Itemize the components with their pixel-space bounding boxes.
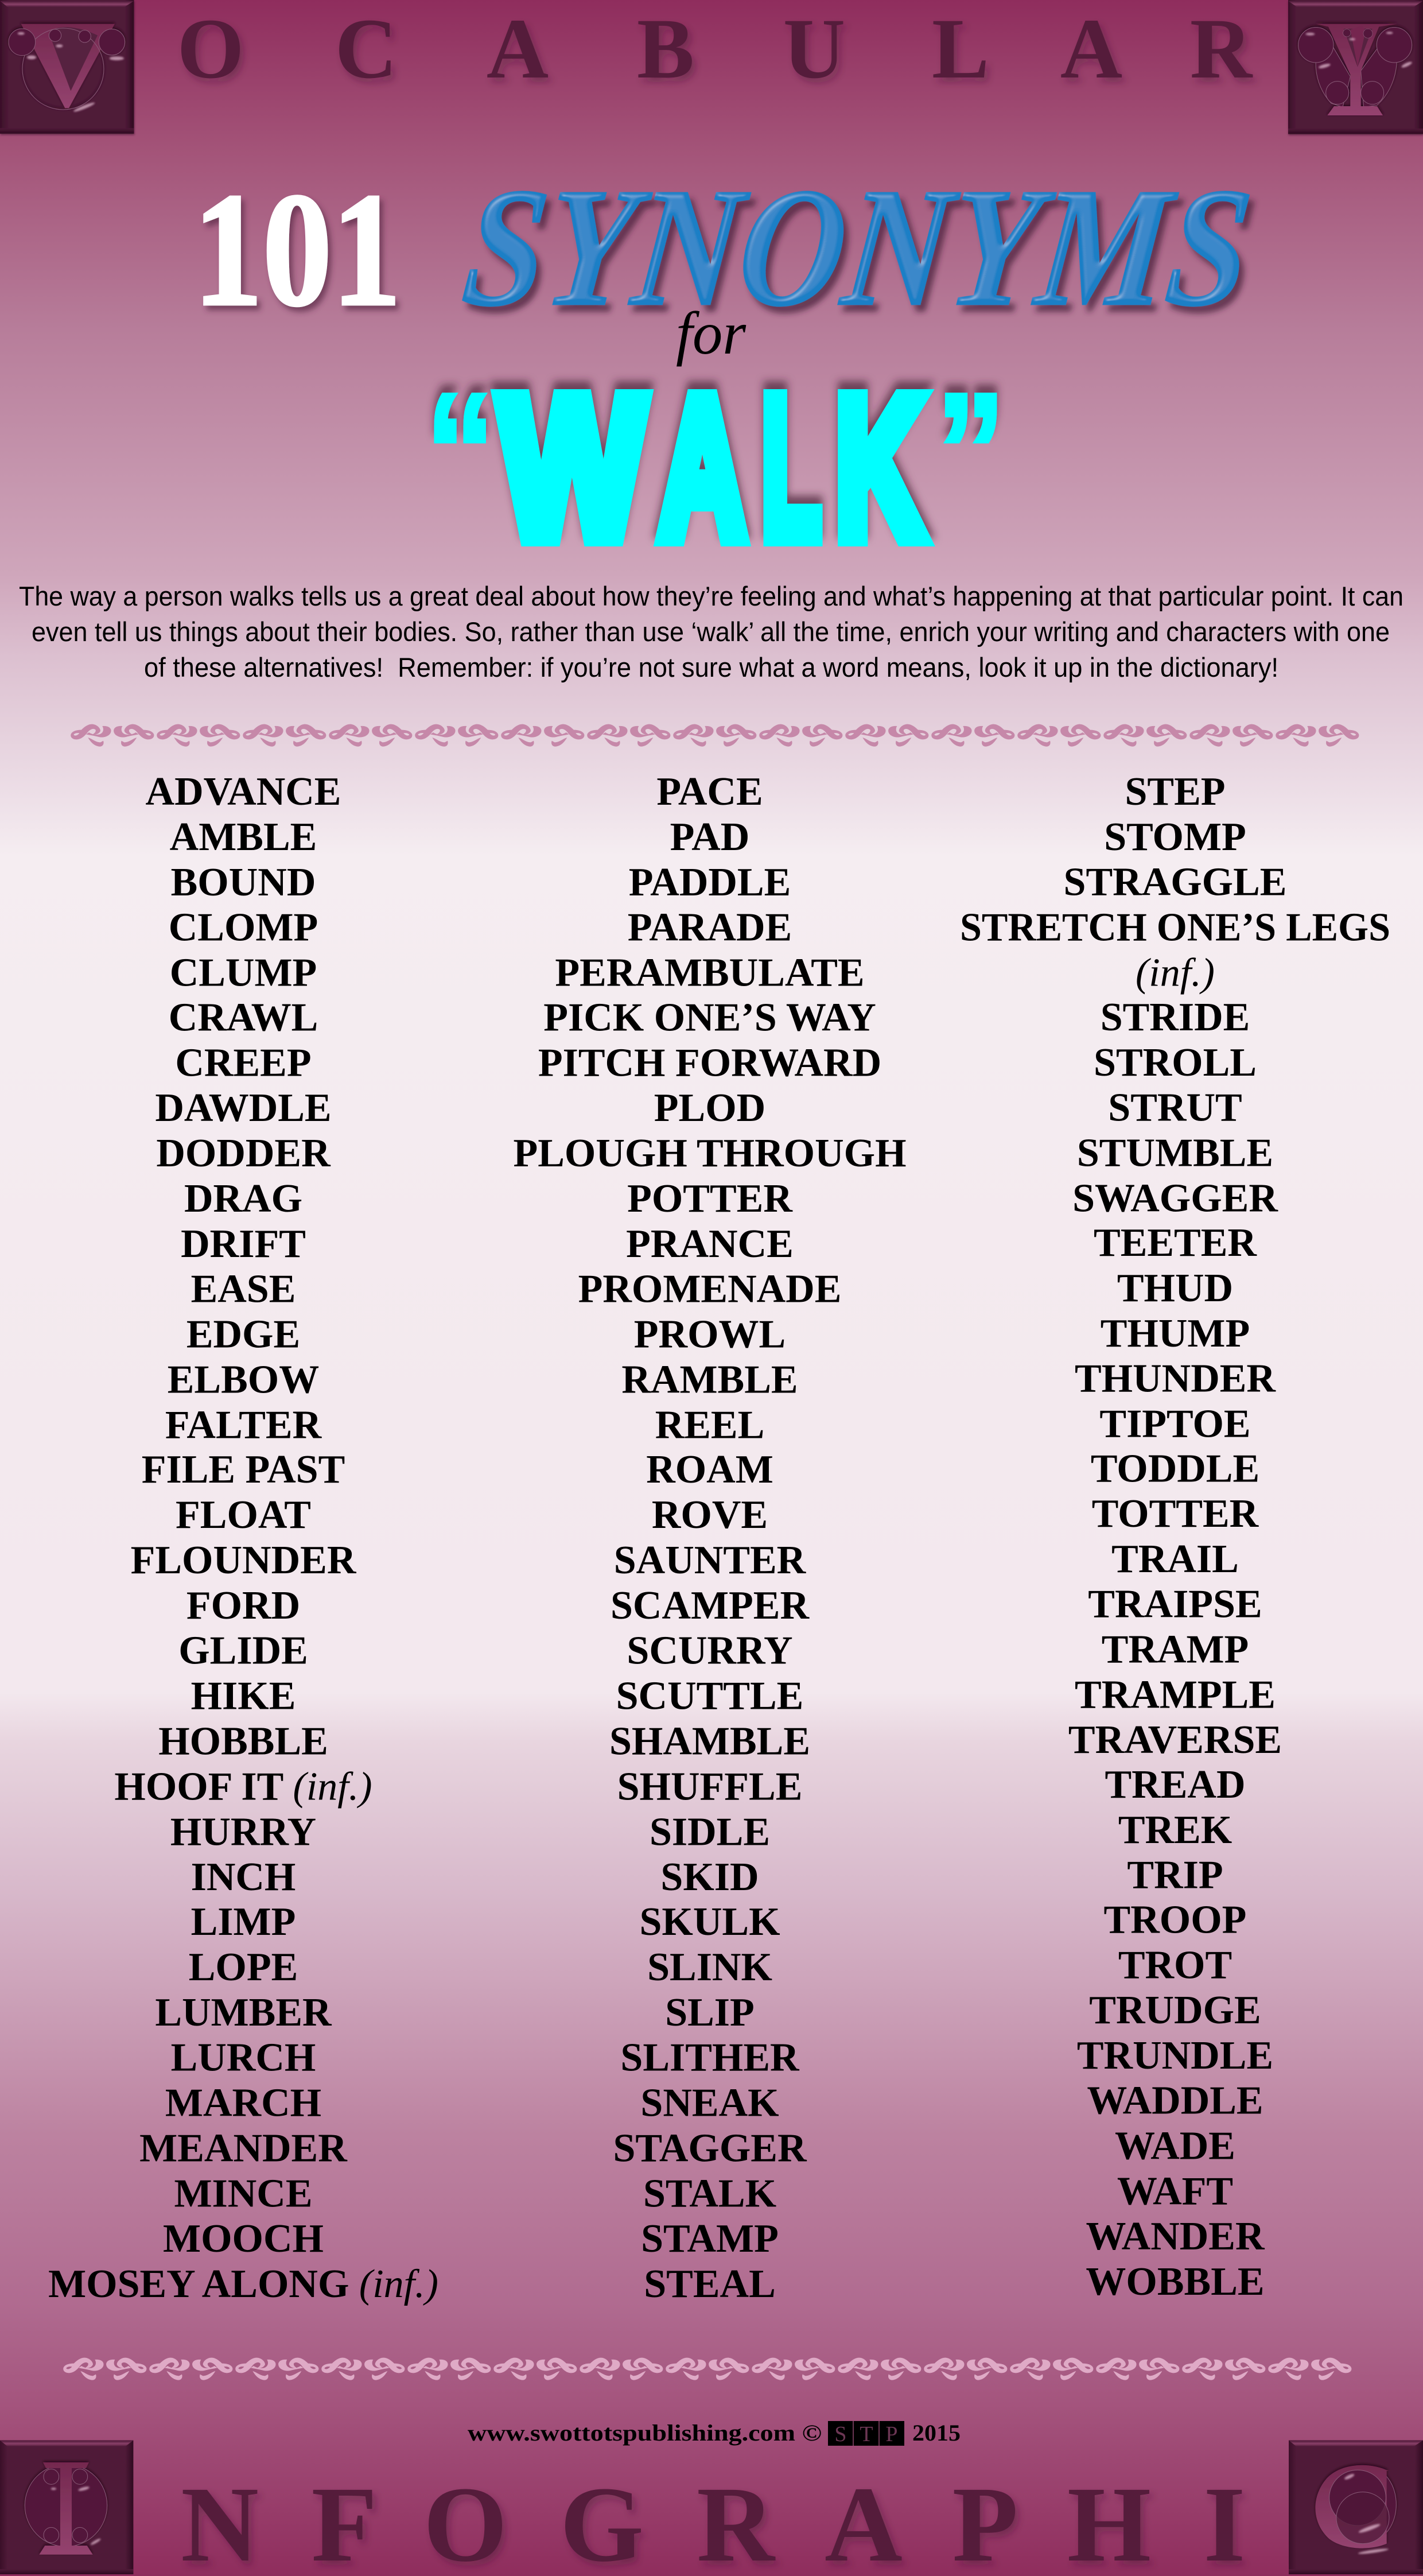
word column 1: MINCE — [174, 2171, 313, 2216]
word column 2: ROAM — [646, 1448, 773, 1492]
word column 2: PITCH FORWARD — [538, 1041, 881, 1085]
word column 1: CREEP — [175, 1041, 312, 1085]
word column 1: ELBOW — [168, 1358, 319, 1402]
word column 2: SCURRY — [627, 1629, 793, 1673]
footer credit: www.swottotspublishing.com © — [468, 2420, 822, 2446]
word column 3: TOTTER — [1092, 1492, 1259, 1536]
word column 2: SAUNTER — [614, 1538, 807, 1582]
heading: VOCABULARY top letters: U — [783, 1, 845, 96]
footer STP logo — [828, 2421, 904, 2446]
word column 2: PLOUGH THROUGH — [513, 1131, 907, 1176]
word column 1: EASE — [191, 1267, 296, 1312]
word column 3: TROOP — [1104, 1898, 1246, 1942]
word column 2: PROWL — [634, 1313, 786, 1357]
word column 3: WOBBLE — [1086, 2260, 1265, 2304]
intro paragraph: even tell us things about their bodies. So, rather than use ‘walk’ all the time, enrich your writing and characters with one — [32, 616, 1390, 647]
title word: WALK with quotes: ” — [936, 358, 1006, 545]
word column 3: WANDER — [1086, 2214, 1265, 2259]
title word: WALK with quotes: W — [500, 357, 645, 579]
word column 2: SHAMBLE — [609, 1720, 810, 1764]
word column 2: PICK ONE’S WAY — [543, 995, 876, 1039]
heading: VOCABULARY top letters: A — [1060, 1, 1122, 96]
heading: VOCABULARY top letters: R — [1190, 1, 1253, 96]
title word: WALK with quotes: “ — [425, 358, 495, 545]
word column 2: SNEAK — [640, 2081, 779, 2125]
word column 3: TRUNDLE — [1077, 2034, 1273, 2078]
word column 2: PARADE — [628, 906, 792, 950]
word column 1: HOBBLE — [158, 1720, 328, 1764]
heading: VOCABULARY top letters: A — [487, 1, 549, 96]
word column 1: FLOUNDER — [131, 1538, 357, 1582]
word column 2: POTTER — [627, 1177, 793, 1221]
word column 2: SCAMPER — [611, 1584, 810, 1628]
word column 3: SWAGGER — [1072, 1176, 1278, 1220]
word column 3: WADDLE — [1087, 2079, 1263, 2123]
word column 2: SLIP — [665, 1991, 755, 2035]
icon: decorative letter Y tile — [1288, 0, 1423, 134]
word column 1: EDGE — [186, 1313, 300, 1357]
word column 3: TREK — [1118, 1808, 1232, 1852]
ornament divider: bottom — [63, 2358, 1351, 2380]
word column 1: DRIFT — [181, 1222, 306, 1266]
word column 2: SLITHER — [620, 2036, 800, 2080]
word column 3: STEP — [1125, 770, 1226, 814]
word column 1 — [48, 770, 438, 2306]
word column 3: TRAIL — [1111, 1537, 1239, 1581]
title word: SYNONYMS: SYNONYMS — [456, 154, 1259, 342]
footer STP logo: P — [885, 2422, 898, 2446]
footer STP logo: T — [860, 2422, 873, 2446]
word column 3: STOMP — [1104, 815, 1246, 859]
word column 1: ADVANCE — [146, 770, 341, 814]
word column 3: STRUT — [1108, 1086, 1242, 1130]
word column 2: STAMP — [641, 2217, 779, 2261]
word column 2: PROMENADE — [578, 1267, 841, 1312]
word column 1: AMBLE — [170, 815, 317, 859]
word column 1: MEANDER — [139, 2126, 348, 2170]
word column 3: STUMBLE — [1077, 1131, 1273, 1176]
word column 2: PAD — [670, 815, 749, 859]
word column 3: STRIDE — [1101, 995, 1250, 1039]
word column 3: TEETER — [1094, 1221, 1257, 1265]
word column 3: THUNDER — [1075, 1357, 1276, 1401]
word column 1: MOOCH — [163, 2217, 324, 2261]
word column 2: SKID — [660, 1855, 759, 1899]
word column 2: PRANCE — [626, 1222, 794, 1266]
word column 3: TODDLE — [1091, 1446, 1259, 1491]
word column 3: TRAIPSE — [1088, 1582, 1262, 1627]
word column 1: GLIDE — [178, 1629, 308, 1673]
word column 2 — [513, 770, 907, 2306]
word column 1: BOUND — [171, 860, 316, 905]
word column 2: PLOD — [654, 1086, 765, 1130]
word column 1: CRAWL — [169, 995, 318, 1039]
word column 2: SLINK — [647, 1945, 772, 1989]
word column 1: DRAG — [184, 1177, 302, 1221]
word column 3: (inf.) — [1136, 951, 1215, 995]
ornament divider: top — [71, 724, 1359, 747]
word column 2: SCUTTLE — [616, 1674, 803, 1718]
heading: VOCABULARY top letters: O — [177, 1, 244, 96]
word column 3: TRAMPLE — [1075, 1673, 1276, 1717]
word column 2: RAMBLE — [621, 1358, 798, 1402]
word column 3: TRUDGE — [1089, 1988, 1261, 2032]
icon: decorative letter I tile — [0, 2441, 133, 2574]
word column 2: PACE — [656, 770, 763, 814]
word column 3: TIPTOE — [1099, 1402, 1251, 1446]
word column 1: CLUMP — [170, 951, 317, 995]
intro paragraph — [19, 581, 1403, 682]
heading: INFOGRAPHIC bottom letters — [181, 2464, 1246, 2576]
word column 1: INCH — [191, 1855, 296, 1899]
word column 1: LOPE — [189, 1945, 298, 1989]
heading: VOCABULARY top letters: C — [335, 1, 397, 96]
heading: VOCABULARY top letters: B — [637, 1, 694, 96]
title word: for: for — [676, 300, 747, 367]
word column 2: SIDLE — [650, 1810, 770, 1854]
word column 3: TREAD — [1105, 1763, 1246, 1807]
heading: VOCABULARY top letters — [177, 1, 1253, 96]
word column 3: TROT — [1118, 1943, 1232, 1987]
icon: decorative letter C tile — [1289, 2441, 1423, 2574]
icon: decorative letter V tile — [0, 0, 134, 134]
title word: WALK with quotes: A — [659, 357, 745, 579]
word column 1: MARCH — [165, 2081, 321, 2125]
word column 3: WADE — [1115, 2124, 1235, 2168]
footer credit — [468, 2420, 961, 2446]
word column 3: TRAVERSE — [1068, 1718, 1282, 1762]
word column 3: TRIP — [1127, 1853, 1223, 1898]
word column 1: HURRY — [170, 1810, 316, 1854]
word column 1: DAWDLE — [155, 1086, 332, 1130]
word column 3: TRAMP — [1102, 1628, 1249, 1672]
word column 1: LURCH — [171, 2036, 316, 2080]
word column 1: FALTER — [165, 1403, 322, 1447]
word column 1: HOOF IT (inf.) — [114, 1764, 372, 1809]
word column 3: THUMP — [1101, 1312, 1250, 1356]
word column 2: STEAL — [644, 2262, 776, 2306]
footer credit: 2015 — [912, 2420, 961, 2446]
word column 3: STRAGGLE — [1064, 860, 1286, 905]
word column 1: FLOAT — [176, 1493, 311, 1537]
word column 3: THUD — [1117, 1266, 1233, 1310]
word column 1: DODDER — [156, 1131, 331, 1176]
word column 1: CLOMP — [169, 906, 318, 950]
word column 2: PERAMBULATE — [555, 951, 865, 995]
word column 2: PADDLE — [629, 860, 791, 905]
title word: WALK with quotes: L — [762, 357, 821, 579]
word column 2: SHUFFLE — [617, 1764, 802, 1809]
word column 3: STRETCH ONE’S LEGS — [960, 906, 1390, 949]
word column 3: WAFT — [1117, 2169, 1233, 2213]
word column 2: STALK — [643, 2171, 776, 2216]
heading: VOCABULARY top letters: L — [932, 1, 989, 96]
word column 3: STROLL — [1094, 1041, 1257, 1085]
word column 1: LUMBER — [155, 1991, 332, 2035]
word column 2: SKULK — [639, 1900, 780, 1944]
word column 1: MOSEY ALONG (inf.) — [48, 2262, 438, 2306]
word column 2: ROVE — [652, 1493, 768, 1537]
title word: WALK with quotes — [425, 357, 1006, 579]
intro paragraph: of these alternatives! Remember: if you’re not sure what a word means, look it up in the dictionary! — [144, 652, 1278, 682]
word column 1: FILE PAST — [142, 1448, 345, 1492]
word column 1: FORD — [186, 1584, 300, 1628]
title number: 101: 101 — [193, 160, 401, 340]
word column 2: REEL — [655, 1403, 764, 1447]
word column 2: STAGGER — [613, 2126, 807, 2170]
word column 1: LIMP — [191, 1900, 296, 1944]
word column 3 — [960, 770, 1390, 2304]
title word: WALK with quotes: K — [836, 357, 923, 579]
footer STP logo: S — [834, 2422, 847, 2446]
word column 1: HIKE — [191, 1674, 296, 1718]
